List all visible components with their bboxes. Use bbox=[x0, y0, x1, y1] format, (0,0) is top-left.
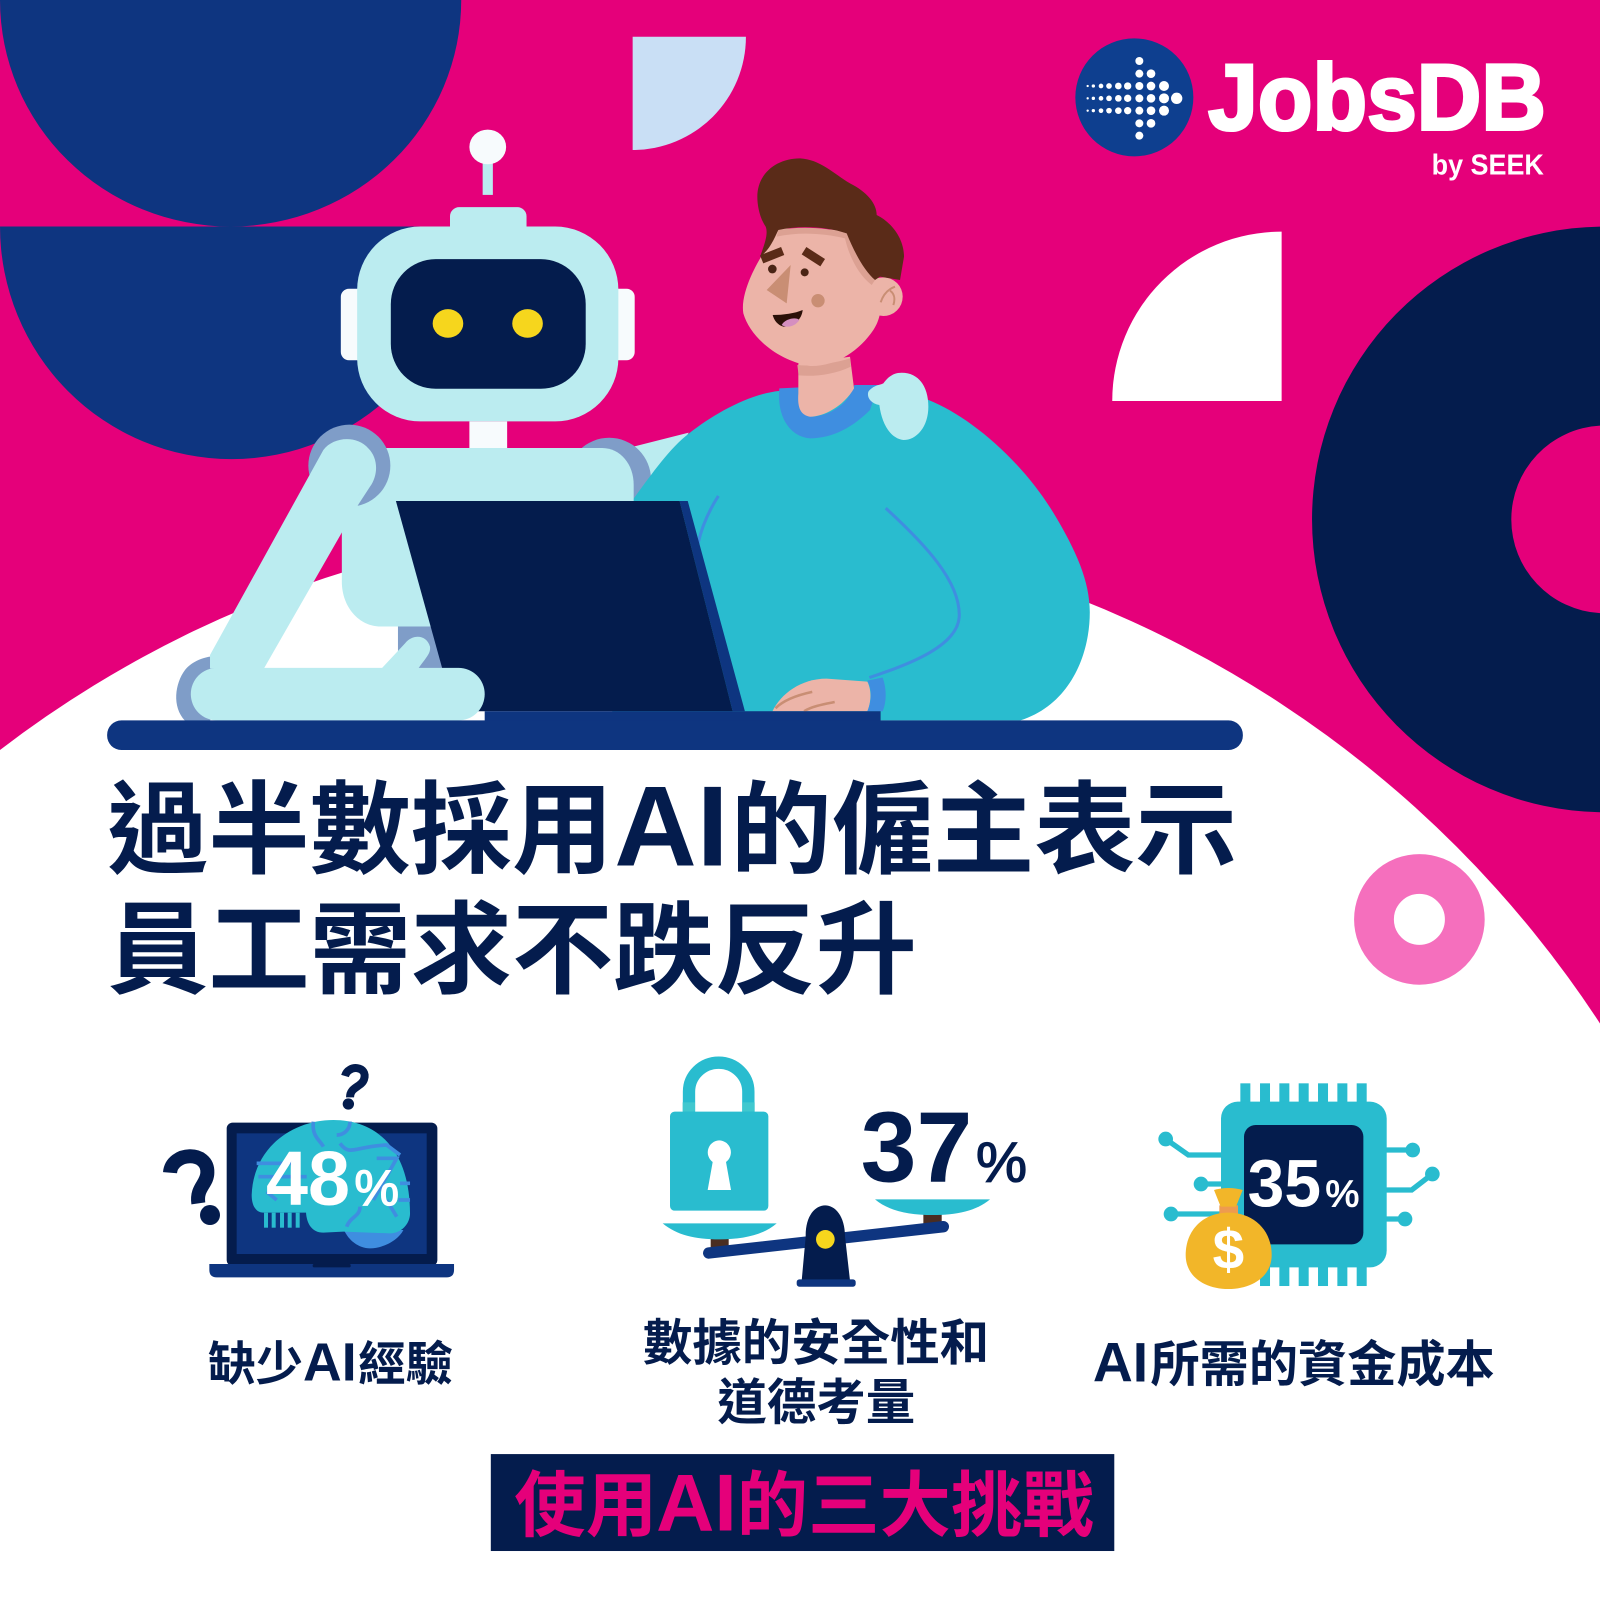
laptop base bbox=[485, 711, 881, 723]
robot antenna ball bbox=[469, 130, 506, 164]
person tongue bbox=[782, 318, 799, 327]
bag tuft bbox=[1214, 1188, 1243, 1207]
illustration: robot arm behind person bbox=[612, 433, 689, 490]
brain teeth bbox=[264, 1213, 300, 1228]
left scale post bbox=[711, 1237, 729, 1247]
icon: laptop with brain 48% bbox=[170, 1068, 454, 1277]
person collar bbox=[779, 385, 878, 438]
brain shape bbox=[252, 1120, 410, 1233]
value 48: 48 bbox=[266, 1136, 350, 1222]
title line 2: 員工需求不跌反升 bbox=[107, 895, 917, 1008]
brain base bbox=[344, 1230, 403, 1248]
banner: three major challenges bbox=[491, 1454, 1114, 1551]
chip traces bbox=[1166, 1139, 1432, 1219]
robot left shoulder joint bbox=[308, 425, 390, 507]
logo wordmark: JobsDB bbox=[1208, 45, 1546, 150]
person eyes bbox=[768, 265, 809, 276]
value 37: 37 bbox=[861, 1091, 972, 1203]
money bag bbox=[1186, 1188, 1272, 1289]
laptop screen bbox=[237, 1133, 427, 1254]
large question mark bbox=[170, 1156, 220, 1225]
background: navy semicircle middle bbox=[0, 227, 463, 459]
illustration: laptop bbox=[396, 501, 881, 723]
keyhole bbox=[708, 1140, 731, 1190]
banner text: AI bbox=[656, 1459, 737, 1549]
robot lower joint bbox=[398, 624, 451, 676]
chip body bbox=[1221, 1102, 1387, 1267]
logo icon: dotted arrow bbox=[1075, 38, 1193, 156]
banner text: 的三大挑戰 bbox=[737, 1467, 1094, 1547]
laptop lid bbox=[227, 1123, 437, 1266]
person sweater bbox=[612, 388, 1090, 720]
robot face screen bbox=[391, 259, 586, 389]
value 35: 35 bbox=[1248, 1148, 1321, 1222]
label: lack of AI experience: AI bbox=[303, 1334, 357, 1393]
background: white hill bbox=[0, 522, 1600, 1600]
robot shoulders bbox=[367, 448, 634, 501]
robot upper arm bbox=[210, 439, 376, 668]
person nose bbox=[767, 265, 791, 303]
background: dark navy ring bbox=[1312, 227, 1600, 812]
percent sign: % bbox=[354, 1160, 399, 1216]
fulcrum pivot bbox=[816, 1230, 835, 1249]
percent sign: % bbox=[976, 1131, 1027, 1194]
person forehead shadow bbox=[777, 228, 875, 285]
robot hand on shoulder bbox=[868, 373, 928, 440]
label: lack of AI experience: 經驗 bbox=[358, 1339, 453, 1392]
brain circuit lines bbox=[257, 1122, 410, 1227]
person hand creases bbox=[776, 692, 835, 711]
bag tie bbox=[1219, 1205, 1238, 1215]
banner text: 使用 bbox=[514, 1467, 657, 1547]
laptop edge bbox=[680, 501, 745, 711]
robot head cap bbox=[450, 207, 527, 248]
laptop keyboard base bbox=[209, 1264, 454, 1277]
person ear bbox=[864, 277, 903, 316]
person hand bbox=[772, 679, 870, 711]
label: data security and ethics bbox=[643, 1316, 989, 1430]
label line 1: 數據的安全性和 bbox=[643, 1316, 989, 1371]
person ear detail bbox=[881, 287, 895, 305]
person hair bbox=[757, 158, 904, 280]
robot ears bbox=[341, 289, 635, 360]
laptop screen back bbox=[396, 501, 733, 711]
chip core bbox=[1244, 1125, 1363, 1244]
banner background bbox=[491, 1454, 1114, 1551]
title line 1: 的僱主表示 bbox=[731, 774, 1237, 887]
background: navy semicircle top bbox=[0, 0, 461, 227]
icon: chip with money bag 35% bbox=[1158, 1083, 1440, 1289]
robot head bbox=[357, 227, 618, 421]
person eyebrows bbox=[762, 251, 823, 263]
fulcrum bbox=[802, 1205, 850, 1281]
robot arm group bbox=[176, 425, 430, 721]
title line 1: 過半數採用 bbox=[107, 774, 613, 887]
padlock shackle highlight bbox=[683, 1102, 755, 1112]
label: lack of AI experience: 缺少 bbox=[208, 1339, 303, 1392]
right scale post bbox=[923, 1213, 942, 1224]
robot eyes bbox=[433, 309, 543, 338]
chip trace nodes bbox=[1158, 1132, 1440, 1226]
person cuff bbox=[867, 678, 886, 711]
person neck bbox=[798, 357, 854, 417]
logo tagline: by SEEK bbox=[1432, 149, 1544, 181]
person face bbox=[743, 228, 881, 366]
padlock body bbox=[670, 1112, 768, 1211]
chip pins bbox=[1240, 1083, 1367, 1286]
title bbox=[107, 763, 1237, 1008]
person mouth bbox=[773, 310, 803, 327]
person arm lines bbox=[698, 496, 959, 678]
padlock shackle bbox=[689, 1063, 748, 1113]
percent sign: % bbox=[1325, 1173, 1359, 1215]
illustration: person bbox=[612, 158, 1090, 720]
icon: padlock on scale 37% bbox=[663, 1063, 1027, 1287]
bag body bbox=[1186, 1213, 1272, 1289]
label: AI capital cost: 所需的資金成本 bbox=[1151, 1338, 1495, 1393]
robot forearm bbox=[191, 668, 485, 720]
label line 2: 道德考量 bbox=[717, 1375, 915, 1430]
title line 1: AI bbox=[614, 763, 729, 890]
illustration: robot right shoulder joint bbox=[567, 438, 651, 521]
robot torso bbox=[342, 480, 469, 627]
illustration: table bbox=[107, 720, 1243, 750]
person neck shadow bbox=[797, 358, 851, 376]
small question mark bbox=[343, 1068, 365, 1110]
left pan bbox=[663, 1223, 777, 1239]
background: light blue quarter circle bbox=[633, 37, 746, 150]
logo: JobsDB by SEEK bbox=[1075, 38, 1546, 181]
person cheek bbox=[811, 294, 825, 307]
label: AI capital cost: AI bbox=[1093, 1332, 1148, 1394]
background: white quarter circle bbox=[1112, 232, 1282, 401]
robot antenna stem bbox=[483, 158, 493, 195]
person head and collar bbox=[743, 158, 904, 438]
right pan bbox=[875, 1199, 990, 1215]
background: pink ring bbox=[1374, 874, 1465, 965]
robot elbow joint bbox=[176, 656, 248, 721]
robot second hand finger bbox=[382, 637, 430, 668]
robot neck bbox=[469, 421, 507, 452]
scale beam bbox=[709, 1227, 943, 1253]
laptop notch bbox=[313, 1264, 351, 1267]
fulcrum base bbox=[797, 1279, 856, 1287]
dollar sign: $ bbox=[1213, 1219, 1244, 1282]
illustration: robot bbox=[176, 130, 635, 721]
